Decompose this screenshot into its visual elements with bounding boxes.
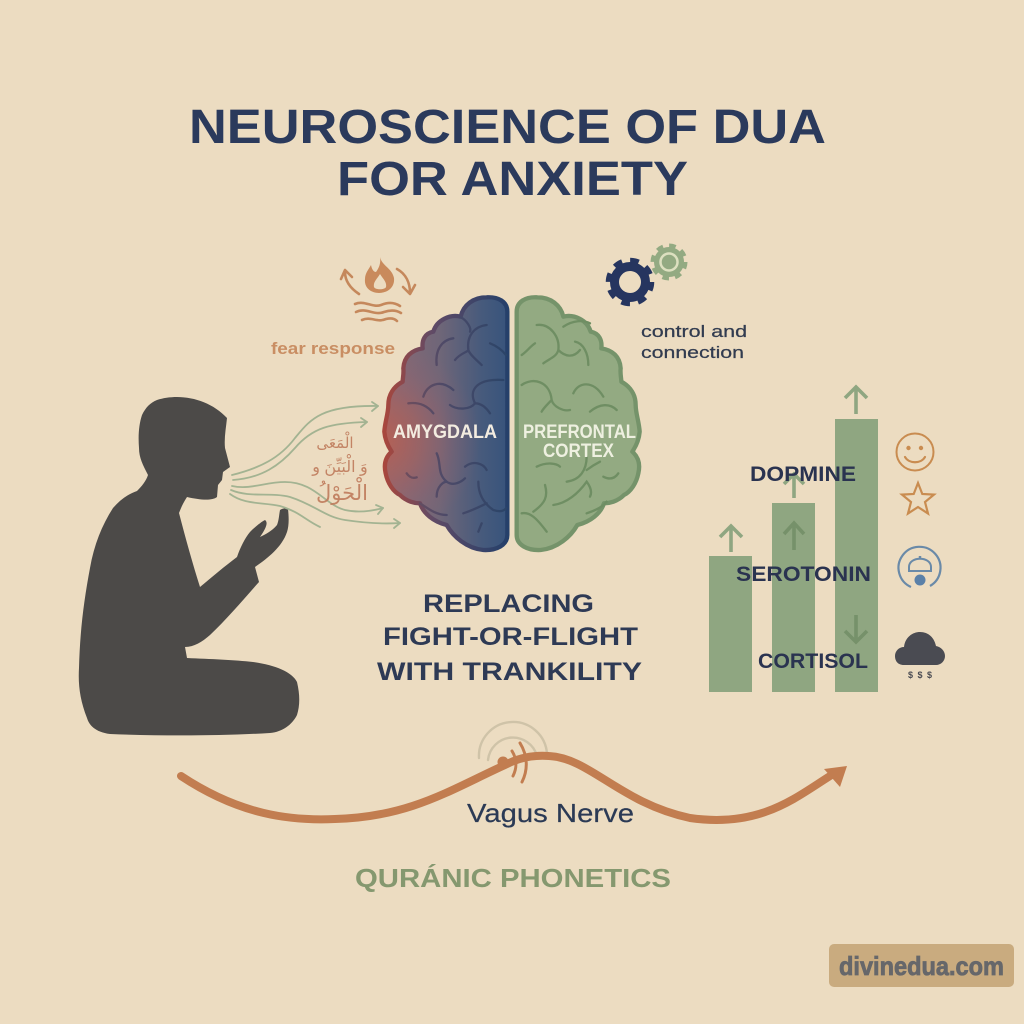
trend arrows — [720, 387, 867, 642]
label: prefrontal cortex: CORTEX — [543, 441, 614, 462]
label: serotonin: SEROTONIN — [736, 563, 871, 586]
watermark: divinedua.com — [839, 951, 1004, 981]
bar chart: neurotransmitters — [709, 387, 878, 692]
arabic dua text: الْمَعَى — [316, 432, 354, 452]
label: cortisol: CORTISOL — [758, 650, 868, 673]
brain diagram — [384, 297, 640, 550]
brain: right hemisphere — [517, 297, 640, 550]
title: NEUROSCIENCE OF DUA — [189, 101, 826, 154]
icon: cloud with drops: $$$ — [908, 670, 932, 680]
label: control and connection: connection — [641, 343, 744, 362]
label: amygdala: AMYGDALA — [393, 422, 497, 443]
label: prefrontal cortex: PREFRONTAL — [523, 422, 636, 443]
vagus nerve curve — [181, 722, 847, 820]
label: fear response: fear response — [271, 339, 395, 358]
watermark — [829, 944, 1014, 987]
brain: left hemisphere — [384, 297, 507, 550]
breath lines — [230, 402, 400, 528]
icon: gears — [609, 246, 685, 303]
arabic dua text: الْحَوْلُ — [316, 476, 368, 505]
title: FOR ANXIETY — [337, 153, 688, 206]
subheading: replacing fight-or-flight: FIGHT-OR-FLIGHT — [383, 623, 638, 651]
label: prefrontal cortex — [523, 422, 636, 462]
label: dopamine: DOPMINE — [750, 463, 856, 486]
label: control and connection — [641, 322, 747, 362]
icon: star — [902, 483, 934, 514]
arabic dua text — [311, 432, 368, 505]
sound wave arcs — [479, 722, 547, 760]
subheading: replacing fight-or-flight: REPLACING — [423, 590, 594, 618]
icon: cloud with drops — [895, 632, 945, 680]
person silhouette praying — [79, 397, 299, 735]
icon: smile — [896, 434, 934, 470]
title — [189, 101, 826, 206]
icon: flame and stress arrows — [341, 257, 415, 321]
icon: serotonin circle — [899, 547, 941, 587]
label: control and connection: control and — [641, 322, 747, 341]
bars — [709, 419, 878, 692]
arabic dua text: وَ الْبَيِّنَ و — [311, 454, 368, 477]
label: vagus nerve: Vagus Nerve — [467, 798, 634, 828]
subheading: replacing fight-or-flight — [377, 590, 642, 686]
label: quranic phonetics: QURÁNIC PHONETICS — [355, 863, 671, 893]
subheading: replacing fight-or-flight: WITH TRANKILITY — [377, 658, 642, 686]
